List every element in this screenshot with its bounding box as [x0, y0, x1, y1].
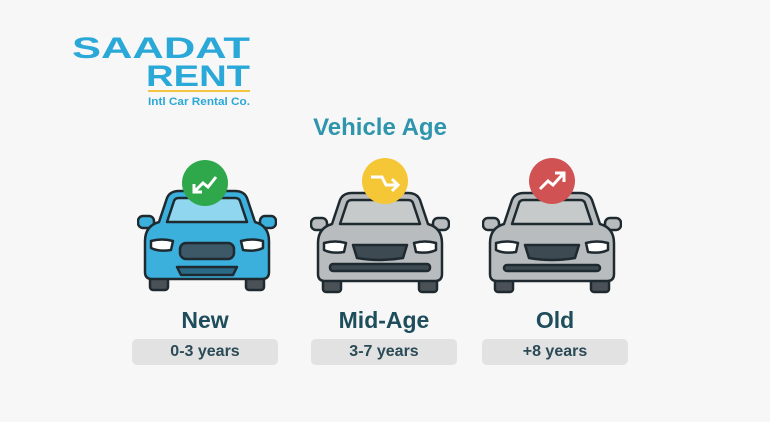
logo: [72, 34, 250, 108]
pill: +8 years: [482, 339, 628, 365]
icon: yellow steady: [362, 158, 408, 204]
car: old: [482, 192, 622, 294]
car: new: [137, 190, 277, 292]
label: Old: Old: [536, 307, 574, 333]
pill: 0-3 years: 0-3 years: [170, 343, 240, 360]
pill: 0-3 years: [132, 339, 278, 365]
logo: Intl Car Rental Co.: [148, 96, 250, 108]
label: Mid-Age: Mid-Age: [339, 307, 429, 333]
icon: red trend up: [529, 158, 575, 204]
pill: +8 years: +8 years: [523, 343, 587, 360]
title: Vehicle Age: [313, 114, 447, 141]
label: New: New: [181, 307, 229, 333]
pill: 3-7 years: [311, 339, 457, 365]
pill: 3-7 years: 3-7 years: [349, 343, 419, 360]
logo: RENT: [146, 60, 250, 93]
car: mid-age: [310, 192, 450, 294]
icon: green trend down: [182, 160, 228, 206]
